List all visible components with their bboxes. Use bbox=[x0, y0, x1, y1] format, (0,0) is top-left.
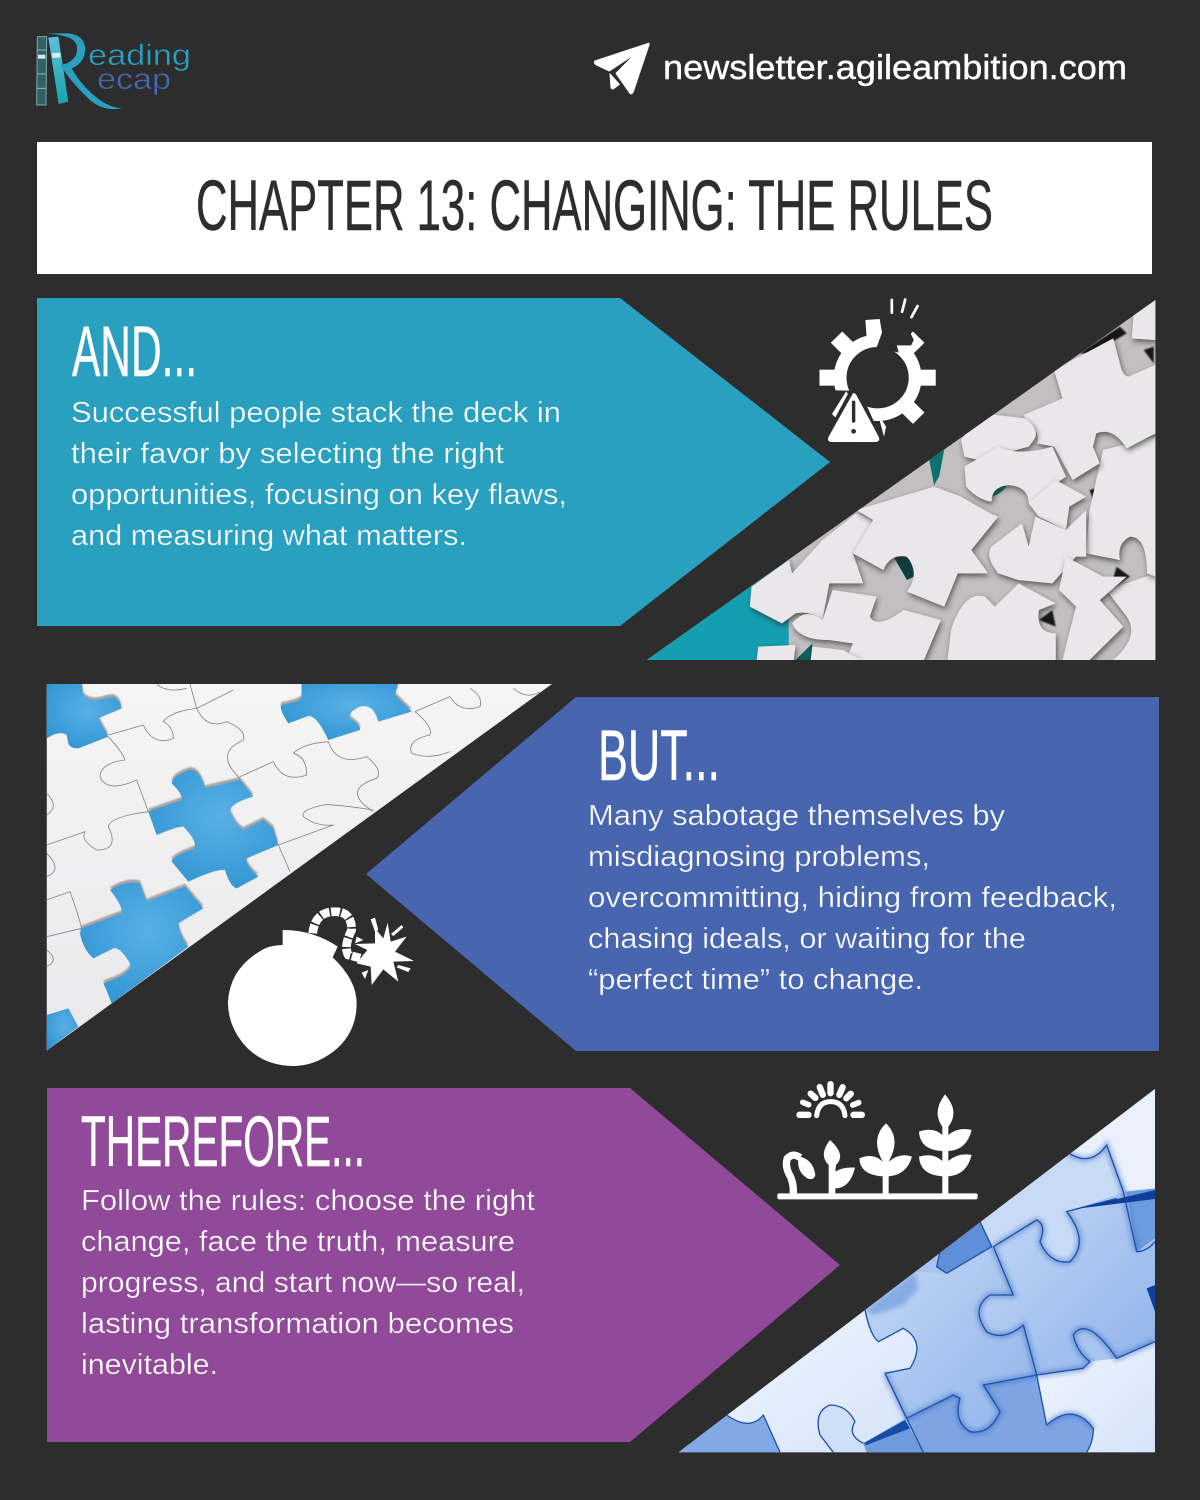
hidden lower left bbox=[823, 390, 884, 447]
deep shadows bbox=[1070, 1190, 1155, 1210]
warning triangle bbox=[828, 393, 879, 442]
dark accents bbox=[1039, 327, 1154, 627]
seams bbox=[47, 684, 540, 967]
text: therefore body: change, face the truth, measure bbox=[81, 1226, 515, 1258]
logo: Reading Recap bbox=[37, 33, 191, 109]
ground bbox=[777, 1193, 978, 1199]
panel: and bbox=[37, 298, 830, 626]
spark lines bbox=[890, 298, 919, 319]
text: but body: Many sabotage themselves by bbox=[588, 800, 1006, 832]
lower left light piece bbox=[727, 1310, 917, 1452]
text: but body: overcommitting, hiding from feedback, bbox=[588, 882, 1117, 914]
icon: sun and growing plants bbox=[777, 1081, 978, 1199]
text: therefore body: progress, and start now—so real, bbox=[81, 1267, 525, 1299]
light piece top right bbox=[1070, 1089, 1155, 1192]
text: but body bbox=[588, 800, 1117, 996]
tall plant bbox=[919, 1094, 972, 1195]
icon: books bbox=[37, 37, 68, 105]
lower right light piece bbox=[1037, 1342, 1155, 1452]
small dark top bbox=[937, 1222, 992, 1273]
soft seam shading bbox=[885, 1145, 1155, 1432]
text: therefore body: lasting transformation becomes bbox=[81, 1308, 514, 1340]
text: but body: “perfect time” to change. bbox=[588, 964, 923, 996]
gap thickness bbox=[66, 684, 412, 983]
text: and body: and measuring what matters. bbox=[71, 520, 467, 552]
photo: scattered white puzzle pieces bbox=[640, 290, 1161, 663]
text: but body: chasing ideals, or waiting for the bbox=[588, 923, 1026, 955]
upper left shaded tip bbox=[865, 1272, 918, 1315]
text: and body: opportunities, focusing on key flaws, bbox=[71, 479, 567, 511]
sprout bbox=[786, 1155, 800, 1195]
letter R swoosh bbox=[45, 33, 122, 109]
text: therefore body: inevitable. bbox=[81, 1349, 218, 1381]
bottom center dark bbox=[907, 1375, 1093, 1452]
photo: white puzzle with blue gaps bbox=[40, 680, 560, 1053]
heading: and: AND... bbox=[72, 313, 197, 392]
medium plant bbox=[859, 1123, 912, 1195]
title banner bbox=[37, 142, 1152, 274]
light pieces bbox=[750, 300, 1155, 660]
seam lines bbox=[727, 1145, 1155, 1452]
text: therefore body: Follow the rules: choose the right bbox=[81, 1185, 535, 1217]
icon: bomb bbox=[228, 912, 414, 1066]
logo word: ecap: ecap bbox=[97, 63, 171, 96]
photo: blue puzzle close-up bbox=[670, 1075, 1170, 1455]
text: therefore body bbox=[81, 1185, 535, 1381]
gear ring and teeth bbox=[819, 319, 936, 424]
icon: paper plane bbox=[594, 43, 649, 94]
blue gaps bbox=[47, 684, 412, 1051]
bottom left blue bbox=[678, 1415, 780, 1452]
small plant bbox=[824, 1140, 855, 1195]
left center piece bbox=[865, 1247, 1037, 1432]
teal table corner bbox=[647, 557, 789, 660]
right piece bbox=[979, 1195, 1155, 1375]
sun bbox=[796, 1081, 865, 1118]
heading: but: BUT... bbox=[598, 717, 720, 796]
icon: broken gear with warning bbox=[819, 298, 936, 447]
text: and body bbox=[71, 397, 567, 552]
panel: but bbox=[366, 697, 1159, 1051]
text: but body: misdiagnosing problems, bbox=[588, 841, 930, 873]
panel: therefore bbox=[47, 1088, 840, 1442]
logo word: eading: eading bbox=[88, 39, 191, 72]
website url: newsletter.agileambition.com bbox=[663, 49, 1127, 87]
knob bbox=[818, 1405, 867, 1452]
gear break bbox=[877, 317, 914, 353]
text: and body: their favor by selecting the right bbox=[71, 438, 504, 470]
text: and body: Successful people stack the deck in bbox=[71, 397, 561, 429]
heading: therefore: THEREFORE... bbox=[81, 1103, 365, 1182]
mid piece top bbox=[980, 1145, 1127, 1262]
